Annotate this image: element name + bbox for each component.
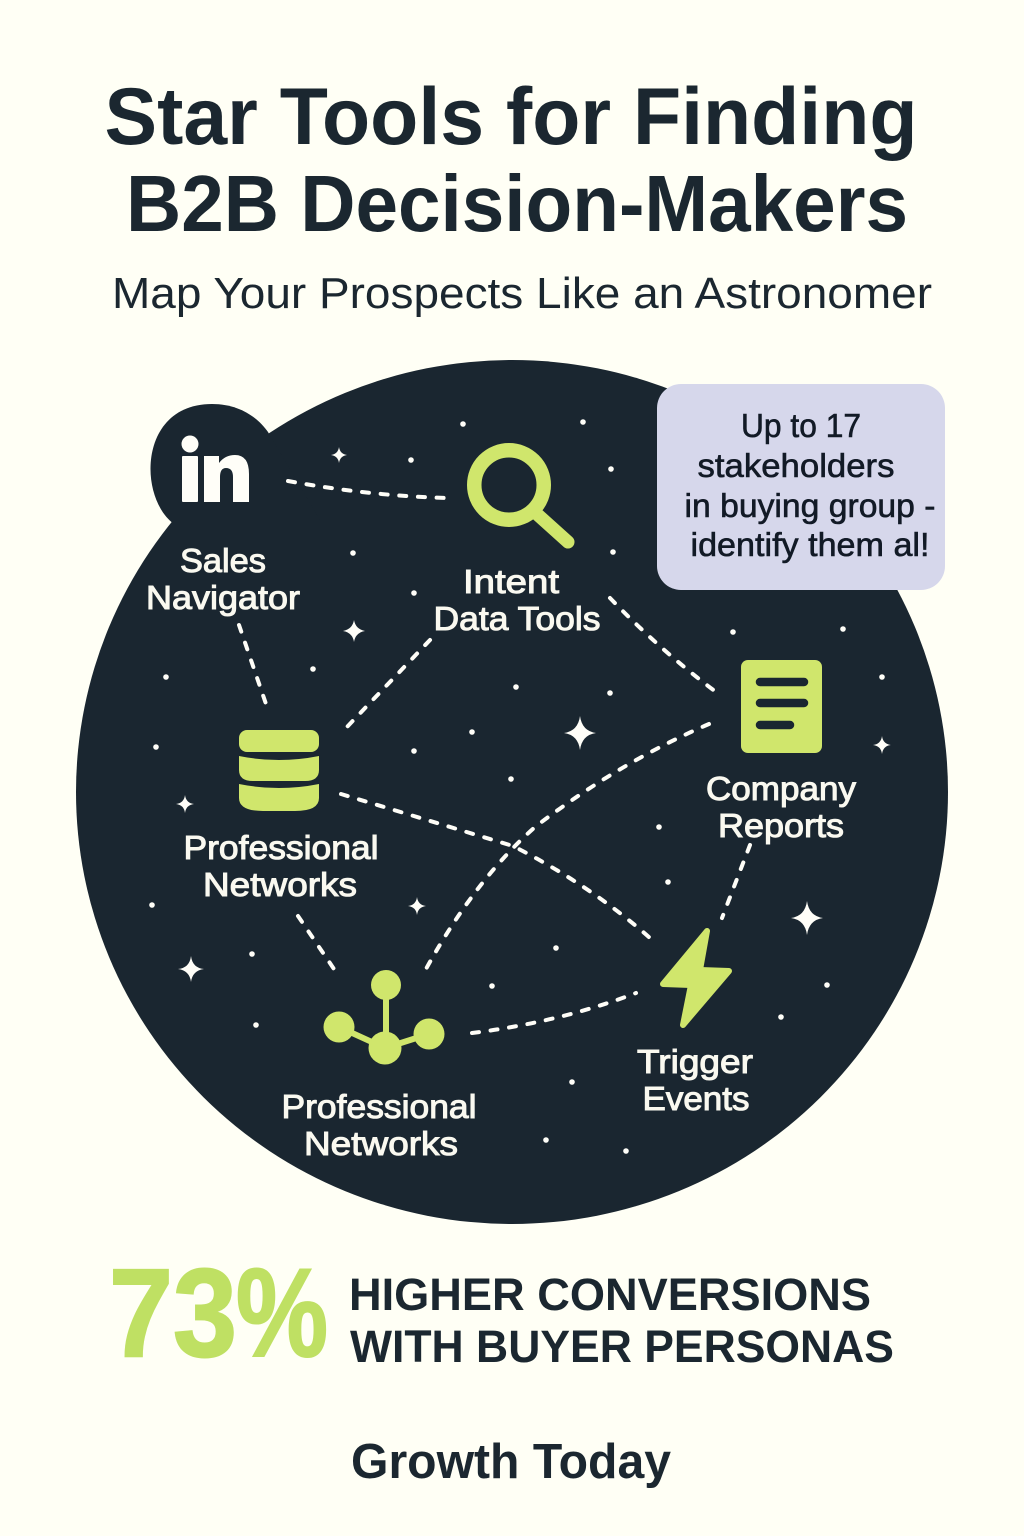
label: Intent Data Tools: Data Tools: [434, 600, 600, 637]
stat description: HIGHER CONVERSIONS: [349, 1269, 871, 1320]
callout: in buying group -: [684, 487, 936, 524]
labels: [146, 542, 857, 1162]
constellation lines: [239, 481, 750, 1033]
label: Trigger Events: Trigger: [637, 1043, 753, 1080]
label: Professional Networks bottom: Professional: [282, 1088, 476, 1125]
label: Sales Navigator: Sales: [180, 542, 266, 579]
title: Star Tools for Finding: [104, 72, 918, 162]
stat description: [349, 1269, 894, 1372]
label: Trigger Events: [637, 1043, 753, 1117]
callout: stakeholders: [698, 447, 894, 484]
panel: star map circle: [76, 360, 948, 1224]
title: B2B Decision-Makers: [126, 159, 908, 248]
label: Professional Networks bottom: [282, 1088, 476, 1162]
subtitle: Map Your Prospects Like an Astronomer: [112, 269, 932, 318]
label: Company Reports: Company: [706, 770, 857, 807]
stat description: WITH BUYER PERSONAS: [350, 1321, 894, 1372]
title: [104, 72, 918, 248]
label: Sales Navigator: [146, 542, 300, 616]
label: Professional Networks left: [184, 829, 378, 903]
callout: Up to 17: [741, 407, 861, 444]
icon: LinkedIn: [182, 436, 249, 502]
label: Sales Navigator: Navigator: [146, 579, 300, 616]
stat: 73%: %: [236, 1244, 328, 1383]
label: Company Reports: [706, 770, 857, 844]
icon: network: [324, 970, 444, 1064]
label: Intent Data Tools: [434, 563, 600, 637]
label: Trigger Events: Events: [642, 1080, 750, 1117]
star field: [149, 419, 891, 1154]
label: Professional Networks bottom: Networks: [304, 1125, 458, 1162]
footer brand: Growth Today: [351, 1435, 671, 1489]
icon: database: [239, 730, 319, 811]
label: Company Reports: Reports: [718, 807, 844, 844]
stat: 73%: 73: [109, 1244, 237, 1383]
icon: magnifier: [474, 450, 568, 542]
label: Professional Networks left: Professional: [184, 829, 378, 866]
label: Professional Networks left: Networks: [203, 866, 357, 903]
icon: lightning bolt: [663, 931, 729, 1025]
callout: identify them al!: [690, 526, 930, 563]
callout: [657, 384, 945, 590]
icon: document: [741, 660, 822, 753]
label: Intent Data Tools: Intent: [463, 563, 559, 600]
